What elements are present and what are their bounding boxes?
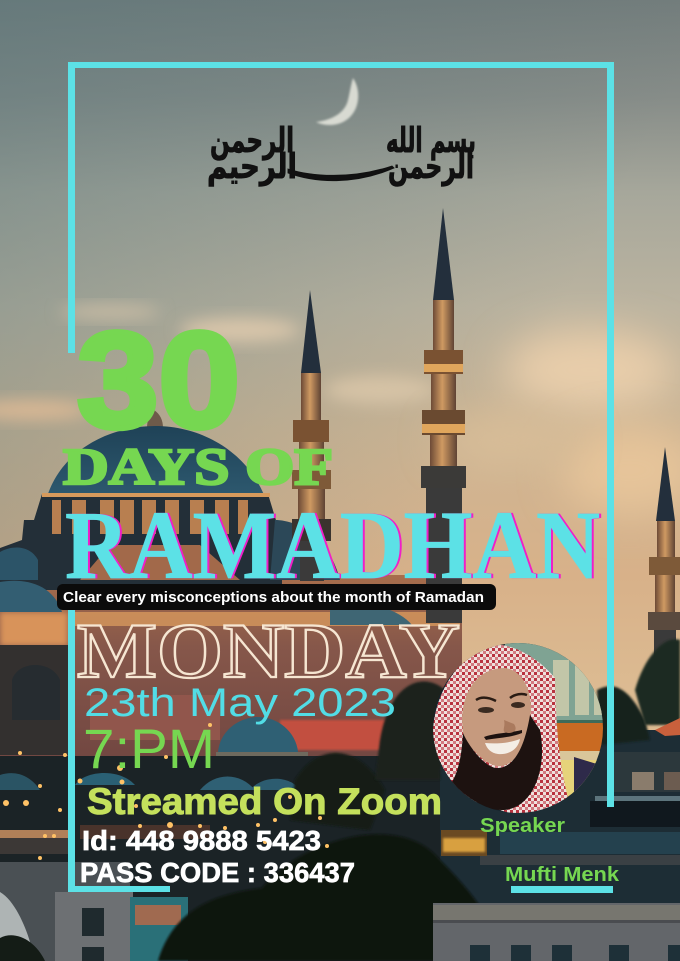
label: speaker name: Mufti Menk [505, 864, 620, 886]
calligraphy: bismillah [207, 121, 476, 187]
minaret: tall centre [421, 208, 466, 623]
frame: cyan border [68, 62, 614, 893]
minaret: left [292, 290, 331, 581]
subtitle pill: Clear every misconceptions about the month of Ramadan [63, 590, 484, 606]
title: days of: DAYS OF [63, 439, 333, 496]
title: ramadhan: RAMADHAN [65, 492, 600, 600]
minaret: far right [648, 447, 680, 660]
day: monday neon outline: MONDAY [77, 607, 460, 695]
mosque main dome and halls [0, 392, 462, 786]
icon: crescent moon [316, 78, 358, 125]
meeting id: Id: 448 9888 5423 [82, 825, 321, 856]
date: 23th May 2023 [84, 681, 396, 725]
city skyline [0, 639, 680, 961]
calligraphy: bismillah: الرحمن [388, 147, 474, 187]
calligraphy: bismillah: الرحيم [207, 147, 297, 187]
calligraphy: bismillah: بسم الله [386, 121, 476, 161]
title: 30: 30 [77, 304, 240, 457]
calligraphy: bismillah: الرحمن [210, 121, 294, 161]
time: 7:PM [83, 717, 215, 780]
pass code: PASS CODE : 336437 [80, 857, 355, 888]
title: ramadhan: RAMADHAN [67, 492, 602, 600]
label: speaker: Speaker [480, 815, 565, 837]
town lights [3, 723, 329, 860]
platform: Streamed On Zoom [87, 781, 442, 822]
subtitle pill [57, 584, 496, 610]
speaker portrait [433, 643, 603, 813]
